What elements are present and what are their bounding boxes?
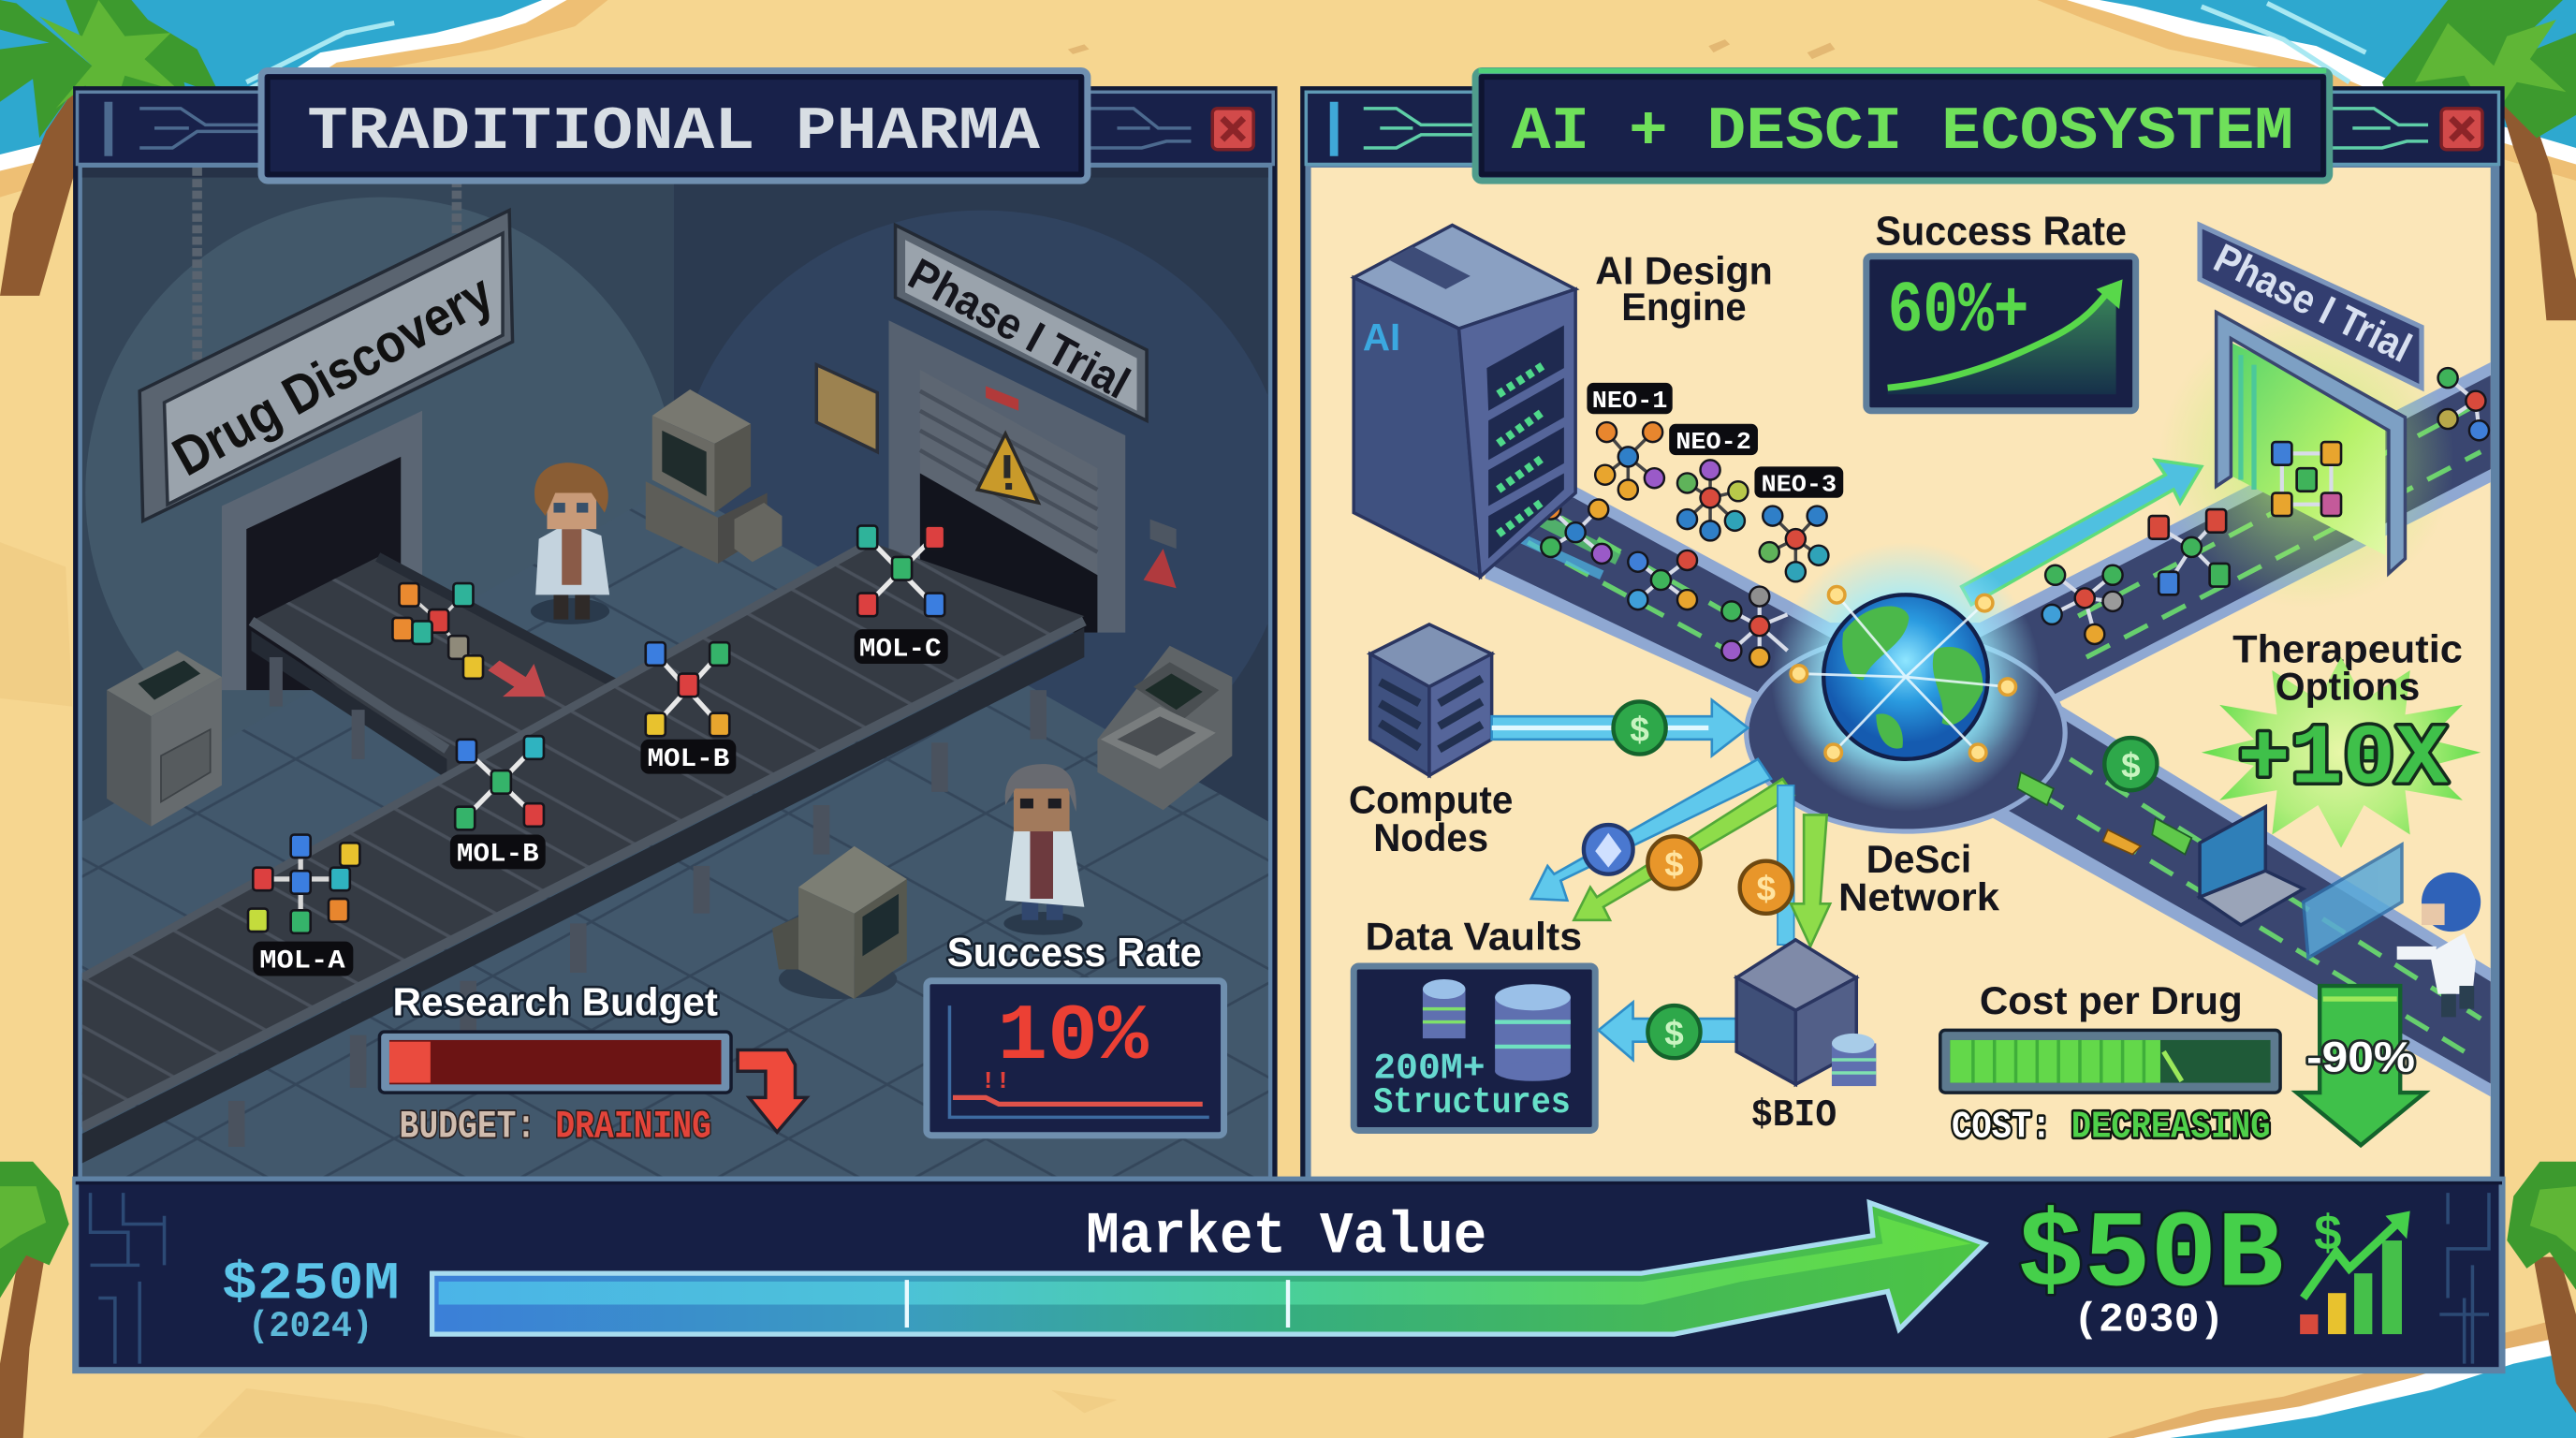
roadside items: $ xyxy=(2121,746,2141,785)
close button xyxy=(2441,109,2482,150)
shutter xyxy=(920,370,1097,575)
panel: AI + DeSci ecosystem xyxy=(1303,89,2502,1186)
icon: growth chart xyxy=(2300,1208,2410,1334)
coin: token xyxy=(1584,825,1633,874)
glow xyxy=(1771,542,2041,812)
sign: phase I trial: Phase I Trial xyxy=(2207,235,2419,372)
compute nodes: Compute xyxy=(1349,778,1513,822)
label: desci network xyxy=(1838,837,2000,918)
data vaults xyxy=(1354,914,1595,1130)
molecule: MOL-A: MOL-A xyxy=(259,947,345,976)
success rate gauge: 10% xyxy=(927,930,1224,1136)
success rate gauge: 10%: !! xyxy=(981,1067,1010,1095)
roadside items xyxy=(2017,738,2191,855)
large database xyxy=(1495,984,1571,1081)
back walls xyxy=(82,168,1292,858)
title plate xyxy=(261,70,1088,181)
title plate: AI + DESCI ECOSYSTEM xyxy=(1512,98,2293,167)
circuit traces xyxy=(1334,102,2428,156)
molecule: MOL-B upper: MOL-B xyxy=(648,745,729,774)
arrow: cost down 90%: -90% xyxy=(2306,1033,2415,1080)
phase I portal xyxy=(2178,309,2446,590)
therapeutic options: Therapeutic xyxy=(2232,626,2463,670)
arrow: compute to hub xyxy=(1492,700,1748,756)
data vaults: 200M+ xyxy=(1373,1048,1486,1089)
scene xyxy=(82,168,1292,1177)
warning sign xyxy=(977,433,1038,503)
molecule: MOL-C: MOL-C xyxy=(859,635,942,664)
molecule: NEO-2 xyxy=(1669,424,1758,540)
molecule: NEO-1 xyxy=(1587,383,1673,500)
close button xyxy=(1212,109,1253,150)
holographic screen xyxy=(2304,844,2402,958)
molecule: MOL-B upper xyxy=(640,642,736,774)
title bar: right xyxy=(1306,70,2499,181)
arrows: hub to vaults xyxy=(1531,759,1830,946)
research budget gauge xyxy=(379,980,807,1149)
molecule: NEO-1: NEO-1 xyxy=(1592,387,1667,415)
arrow: BIO to vaults xyxy=(1599,1003,1738,1060)
coin: orange xyxy=(1647,836,1701,888)
data vaults: Structures xyxy=(1373,1082,1571,1123)
sign: drug discovery: Drug Discovery xyxy=(164,263,503,488)
compute nodes xyxy=(1349,624,1513,859)
$BIO server: $BIO xyxy=(1751,1094,1837,1137)
sign: phase I trial: Phase I Trial xyxy=(900,249,1137,409)
pipeline roads xyxy=(1486,361,2492,1097)
palm tree: top-right xyxy=(2382,0,2576,320)
cost per drug gauge: COST: DECREASING xyxy=(1952,1106,2271,1149)
red drop arrow xyxy=(488,661,546,697)
success rate gauge: 60% xyxy=(1866,208,2136,411)
cost per drug gauge: Cost per Drug xyxy=(1980,978,2243,1022)
machine: floor unit xyxy=(772,846,907,999)
starburst xyxy=(2202,657,2481,848)
$BIO server xyxy=(1736,940,1876,1137)
sea: top-left xyxy=(0,0,607,198)
compute nodes: Nodes xyxy=(1373,815,1488,859)
arrow: to portal xyxy=(1962,460,2202,605)
success rate gauge: 60%: Success Rate xyxy=(1875,208,2127,254)
scientist: tired xyxy=(531,462,609,624)
icon: growth chart: $ xyxy=(2313,1208,2343,1264)
hub xyxy=(1747,634,2065,831)
molecule: NEO-3 xyxy=(1754,466,1843,581)
palm tree: top-left xyxy=(0,0,220,296)
conveyor: main belt xyxy=(82,542,1084,1164)
door: phase I trial xyxy=(889,320,1125,633)
data vaults: Data Vaults xyxy=(1365,914,1582,958)
AI server rack: AI xyxy=(1363,315,1400,359)
label: AI design engine xyxy=(1596,256,1771,328)
small database xyxy=(1423,979,1466,1038)
label: desci network: DeSci xyxy=(1866,837,1971,881)
poster xyxy=(816,365,877,452)
title plate: TRADITIONAL PHARMA xyxy=(307,98,1040,167)
start value: $250M xyxy=(222,1254,399,1313)
molecule: NEO-2: NEO-2 xyxy=(1676,428,1751,456)
laptop xyxy=(2200,807,2304,925)
arrows: hub to vaults: $ xyxy=(1756,870,1776,908)
success rate gauge: 10%: 10% xyxy=(997,993,1149,1082)
floor xyxy=(82,485,1268,1177)
success rate gauge: 60%: 60%+ xyxy=(1888,271,2029,353)
label: desci network: Network xyxy=(1838,874,2000,918)
scene background xyxy=(1311,168,2491,1180)
research budget gauge: BUDGET: DRAINING xyxy=(399,1104,711,1149)
arrow: BIO to vaults: $ xyxy=(1664,1014,1684,1052)
machine: left console xyxy=(107,651,222,827)
end value: (2030) xyxy=(2073,1298,2224,1344)
therapeutic options: +10X xyxy=(2237,712,2448,808)
panel frame xyxy=(1303,89,2502,1186)
arrows: hub to vaults: $ xyxy=(1664,844,1684,883)
title plate xyxy=(1475,70,2330,181)
start value xyxy=(222,1254,399,1347)
arrow: cost down 90% xyxy=(2297,986,2425,1145)
sign: drug discovery xyxy=(139,168,513,521)
door: drug discovery xyxy=(222,411,422,690)
success rate gauge: 10%: Success Rate xyxy=(947,930,1202,976)
molecule: NEO-3: NEO-3 xyxy=(1761,471,1837,499)
circuit traces xyxy=(109,102,1191,156)
arrow: compute to hub: $ xyxy=(1630,711,1649,749)
palm tree: bottom-left xyxy=(0,1162,69,1438)
molecule: MOL-C xyxy=(855,526,948,664)
arrow: draining xyxy=(738,1049,807,1132)
computer stack xyxy=(646,389,782,564)
therapeutic options xyxy=(2202,626,2481,848)
label: AI design engine: AI Design xyxy=(1595,249,1773,293)
molecule: MOL-A xyxy=(248,835,359,976)
panel: traditional pharma xyxy=(76,89,1292,1186)
panel: market value xyxy=(76,1180,2502,1371)
research budget gauge: Research Budget xyxy=(392,980,718,1024)
title bar: left xyxy=(77,70,1273,181)
end value: $50B xyxy=(2017,1195,2284,1317)
heading: Market Value xyxy=(1086,1202,1486,1269)
broken molecule xyxy=(392,583,546,697)
panel frame xyxy=(76,89,1275,1186)
cost per drug gauge xyxy=(1940,978,2280,1149)
road molecule group xyxy=(1541,368,2489,668)
palm tree: bottom-right xyxy=(2507,1162,2576,1413)
label: AI design engine: Engine xyxy=(1621,285,1747,329)
wall alarm xyxy=(1144,520,1177,588)
machine: right console xyxy=(1097,646,1232,810)
molecule: MOL-B lower xyxy=(450,736,546,870)
sea: top-right xyxy=(2037,0,2576,181)
scientist: discouraged xyxy=(1003,764,1084,935)
conveyor: drug discovery branch xyxy=(252,557,627,779)
AI server rack xyxy=(1354,225,1575,577)
network nodes xyxy=(1791,587,2016,761)
growth arrow xyxy=(432,1203,1984,1334)
coin: orange lower xyxy=(1740,861,1793,914)
scientist: AI xyxy=(2397,873,2481,1017)
sea: bottom-right xyxy=(2103,1314,2576,1438)
therapeutic options: Options xyxy=(2276,665,2420,709)
molecule: MOL-B lower: MOL-B xyxy=(457,841,539,870)
start value: (2024) xyxy=(248,1306,373,1347)
globe xyxy=(1791,587,2016,761)
